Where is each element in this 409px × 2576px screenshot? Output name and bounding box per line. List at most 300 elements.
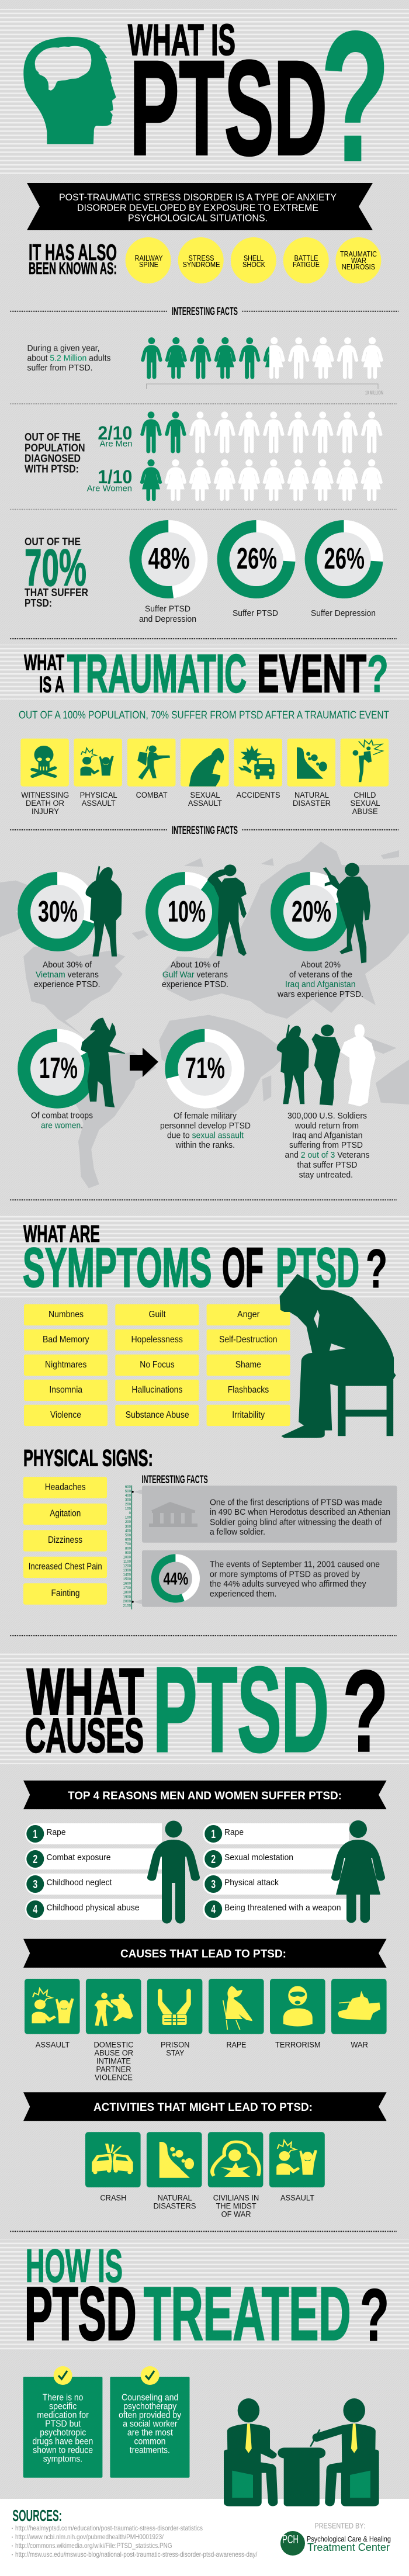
- timeline: 900: [125, 1552, 131, 1555]
- section heading: what are symptoms of PTSD: OF: [222, 1237, 264, 1299]
- icon: check badge: [141, 2366, 160, 2385]
- timeline: 100: [125, 1516, 131, 1520]
- presented by logo: PRESENTED BY:: [314, 2522, 365, 2530]
- cause labels: ASSAULT: [36, 2040, 70, 2049]
- caption: 300,000 soldiers: [285, 1112, 369, 1180]
- sources: http://healmyptsd.com/education/post-traumatic-stress-disorder-statistics: [15, 2524, 203, 2532]
- fact box: September 11: [142, 1550, 397, 1607]
- donut: 20%: [268, 870, 352, 954]
- section heading: how is PTSD treated: ?: [360, 2274, 389, 2356]
- cause labels: INTIMATE: [96, 2056, 131, 2065]
- figure: man on chair: [280, 1274, 396, 1438]
- hero striped band: [0, 9, 409, 174]
- illustration: therapy session: [224, 2398, 379, 2506]
- cause labels: VIOLENCE: [95, 2073, 133, 2082]
- treatment card: medication: shown to reduce: [33, 2445, 93, 2455]
- fact box: September 11: experienced them.: [210, 1589, 276, 1599]
- treatment card: counseling: often provided by: [119, 2410, 181, 2420]
- icon: child abuse: [353, 740, 383, 782]
- section heading: what causes PTSD: CAUSES: [25, 1708, 144, 1763]
- list: women reasons: 4: [211, 1902, 216, 1916]
- timeline: 1400: [123, 1574, 131, 1577]
- event labels: INJURY: [32, 807, 59, 816]
- caption: 300,000 soldiers: that suffer PTSD: [297, 1161, 358, 1170]
- sources: SOURCES:: [12, 2506, 62, 2525]
- section heading: what is a traumatic event: IS A: [39, 672, 64, 698]
- caption: Iraq and Afganistan: wars experience PTSD.: [277, 990, 363, 999]
- treatment card: medication: PTSD but: [45, 2419, 81, 2429]
- cause labels: ABUSE OR: [95, 2048, 133, 2057]
- section heading: what are symptoms of PTSD: [23, 1220, 387, 1299]
- cause labels: STAY: [166, 2048, 184, 2057]
- event labels: ACCIDENTS: [236, 791, 280, 799]
- icon: assault: [32, 1989, 74, 2023]
- event labels: [21, 791, 380, 816]
- caption: female military: [160, 1112, 251, 1150]
- text: out of the 70%: OUT OF THE: [25, 536, 81, 548]
- caption: 300,000 soldiers: and 2 out of 3 Veterans: [285, 1151, 369, 1160]
- text: out of the 70%: THAT SUFFER: [25, 587, 88, 598]
- physical sign cards: Fainting: [51, 1588, 79, 1598]
- second striped band: [0, 645, 409, 700]
- donut: 48%: [131, 522, 206, 596]
- section heading: how is PTSD treated: PTSD: [25, 2272, 137, 2356]
- world map background: [0, 842, 409, 1188]
- soldier: with rifle: [323, 863, 370, 963]
- event labels: ASSAULT: [82, 799, 116, 808]
- caption: female military: within the ranks.: [175, 1141, 235, 1150]
- physical sign cards: Agitation: [50, 1509, 81, 1519]
- caption: female military: Of female military: [174, 1112, 237, 1121]
- list: women reasons: Being threatened with a weapon: [224, 1903, 341, 1913]
- scale bracket: 10 million: [146, 384, 383, 396]
- section heading: what are symptoms of PTSD: SYMPTOMS: [23, 1237, 212, 1299]
- list: men reasons: Rape: [47, 1827, 65, 1837]
- donut: 44%: 44%: [164, 1570, 188, 1589]
- list: men reasons: Childhood physical abuse: [47, 1903, 139, 1913]
- icon: natural disaster: [297, 747, 327, 779]
- caption: Gulf War: About 10% of: [171, 961, 220, 970]
- list: women reasons: Sexual molestation: [224, 1853, 293, 1862]
- fact box: Herodotus: in 490 BC when Herodotus described an Athenian: [210, 1507, 390, 1517]
- third striped band: [0, 1216, 409, 1299]
- donut: 71%: [164, 1028, 245, 1109]
- text: out of the population diagnosed: DIAGNOSED: [25, 452, 81, 464]
- timeline: 1500: [123, 1578, 131, 1581]
- heading: it has also been known as: [29, 240, 117, 278]
- symptom cards: Anger: [237, 1310, 259, 1320]
- text: out of the population diagnosed: OUT OF THE: [25, 431, 81, 443]
- list: women reasons: 2: [211, 1852, 216, 1866]
- treatment card: medication: psychotropic: [40, 2428, 86, 2437]
- fact box: Herodotus: One of the first descriptions of PTSD was made: [210, 1497, 382, 1507]
- donut: 26% depression: [309, 524, 379, 594]
- heading: physical signs: PHYSICAL SIGNS:: [23, 1446, 153, 1471]
- section heading: what is PTSD: WHAT IS: [128, 15, 235, 64]
- banner: causes that lead to PTSD: CAUSES THAT LEAD TO PTSD:: [120, 1947, 286, 1960]
- timeline: 200: [125, 1521, 131, 1524]
- banner: definition: [27, 183, 373, 230]
- donut: 44%: [149, 1552, 202, 1605]
- text: out of the population diagnosed: WITH PTSD:: [25, 463, 79, 475]
- icon: tank: [338, 1991, 380, 2020]
- sources: http://msw.usc.edu/mswusc-blog/national-post-traumatic-stress-disorder-ptsd-awareness-day/: [15, 2550, 258, 2558]
- icon: large woman: [331, 1820, 385, 1923]
- treatment card: counseling: [110, 2366, 189, 2478]
- green activity cards: [85, 2132, 325, 2187]
- symptom cards: Bad Memory: [43, 1335, 89, 1345]
- activity labels: CIVILIANS IN: [213, 2194, 259, 2203]
- treatment card: counseling: Counseling and: [122, 2393, 178, 2402]
- timeline: 1800: [123, 1591, 131, 1595]
- text: 5.2 million adults: [27, 344, 111, 373]
- sources: [12, 2506, 258, 2558]
- banner: causes that lead to PTSD: [23, 1939, 387, 1968]
- donut captions: and Depression: [139, 615, 196, 624]
- yellow circles: other names: RAILWAY: [134, 254, 163, 262]
- donut captions: Suffer PTSD: [233, 609, 278, 618]
- sources: http://commons.wikimedia.org/wiki/File:PTSD_statistics.PNG: [15, 2542, 172, 2550]
- physical sign cards: Dizziness: [48, 1535, 82, 1545]
- yellow circles: other names: SHOCK: [242, 260, 265, 269]
- donut captions: [139, 605, 376, 624]
- section heading: what is a traumatic event: ?: [367, 645, 389, 704]
- timeline: 600: [125, 1486, 131, 1489]
- activity labels: ASSAULT: [280, 2194, 314, 2203]
- treatment card: counseling: a social worker: [123, 2419, 178, 2429]
- section heading: what is a traumatic event: WHAT: [24, 651, 64, 676]
- cause icons: [32, 1986, 380, 2030]
- event labels: WITNESSING: [21, 791, 69, 799]
- donut: 71%: 71%: [185, 1051, 225, 1085]
- timeline: 300: [125, 1525, 131, 1529]
- event labels: ABUSE: [352, 807, 378, 816]
- caption: Iraq and Afganistan: of veterans of the: [289, 971, 352, 980]
- symptom cards: Flashbacks: [228, 1385, 269, 1395]
- icon: large man: [147, 1821, 200, 1924]
- yellow event cards: [20, 739, 389, 787]
- list: men reasons: Combat exposure: [47, 1853, 111, 1862]
- section heading: what are symptoms of PTSD: ?: [366, 1238, 387, 1299]
- timeline: 500: [125, 1534, 131, 1538]
- fact box: Herodotus: Soldier going blind after witnessing the death of: [210, 1517, 382, 1527]
- yellow circles: other names: SYNDROME: [182, 260, 220, 269]
- text: 5.2 million adults: During a given year,: [27, 344, 99, 354]
- treatment card: medication: There is no: [43, 2393, 83, 2402]
- list: men reasons: [25, 1823, 162, 1920]
- banner: activities that might lead to PTSD: ACTIVITIES THAT MIGHT LEAD TO PTSD:: [93, 2101, 313, 2114]
- text: 5.2 million adults: about 5.2 Million adults: [27, 354, 111, 363]
- banner: definition: POST-TRAUMATIC STRESS DISORDER IS A TYPE OF ANXIETY: [59, 192, 337, 203]
- fact box: Herodotus: a fellow soldier.: [210, 1527, 265, 1537]
- yellow circles: other names: FATIGUE: [293, 260, 320, 269]
- soldier: female: [81, 1018, 125, 1107]
- event labels: COMBAT: [136, 791, 168, 799]
- donut: 48%: 48%: [148, 542, 190, 575]
- caption: Iraq and Afganistan: Iraq and Afganistan: [285, 980, 355, 989]
- cause labels: PRISON: [161, 2040, 189, 2049]
- donut: 30%: [15, 870, 99, 954]
- text: 5.2 million adults: suffer from PTSD.: [27, 363, 92, 373]
- activity labels: THE MIDST: [216, 2202, 257, 2211]
- treatment card: medication: medication for: [37, 2410, 89, 2420]
- symptom cards: Guilt: [148, 1310, 166, 1320]
- heading: it has also been known as: IT HAS ALSO: [29, 240, 117, 265]
- list: women reasons: Rape: [224, 1827, 244, 1837]
- banner: top 4 reasons: TOP 4 REASONS MEN AND WOMEN SUFFER PTSD:: [68, 1789, 342, 1802]
- section heading: what are symptoms of PTSD: WHAT ARE: [23, 1220, 100, 1247]
- physical sign cards: Increased Chest Pain: [29, 1562, 102, 1572]
- soldier: rifle at shoulder: [86, 866, 122, 957]
- cause labels: TERRORISM: [275, 2040, 321, 2049]
- treatment card: counseling: are the most: [127, 2428, 174, 2437]
- timeline: 100: [125, 1508, 131, 1511]
- banner: definition: PSYCHOLOGICAL SITUATIONS.: [128, 213, 268, 223]
- event labels: SEXUAL: [190, 791, 220, 799]
- caption: combat troops: are women.: [41, 1121, 83, 1130]
- list: women reasons: 1: [211, 1827, 216, 1841]
- icon: skull and bones: [33, 746, 55, 776]
- caption: combat troops: [31, 1111, 93, 1130]
- icon: terrorism: [283, 1986, 313, 2026]
- arrow: [130, 1048, 158, 1077]
- symptom cards: Nightmares: [45, 1360, 87, 1370]
- donut: 10%: [138, 865, 232, 958]
- yellow circles: other names: BATTLE: [294, 254, 318, 262]
- section heading: what is a traumatic event: TRAUMATIC: [67, 644, 247, 704]
- list: men reasons: 2: [33, 1852, 37, 1866]
- caption: 300,000 soldiers: stay untreated.: [299, 1171, 353, 1180]
- stat: 1/10 are women: [87, 466, 132, 494]
- presented by logo: [280, 2522, 391, 2556]
- timeline: 0: [129, 1512, 131, 1515]
- treatment card: medication: symptoms.: [43, 2454, 82, 2464]
- treatment card: counseling: psychotherapy: [123, 2401, 176, 2411]
- activity labels: DISASTERS: [153, 2202, 196, 2211]
- presented by logo: Psychological Care & Healing: [307, 2535, 391, 2543]
- yellow circles: other names: SHELL: [244, 254, 264, 262]
- soldier: saluting: [207, 864, 247, 957]
- icon: crash: [92, 2144, 133, 2174]
- donut: 26% PTSD: [221, 524, 292, 594]
- donut: 30%: 30%: [38, 895, 78, 928]
- timeline: 800: [125, 1547, 131, 1550]
- icon: physical assault: [80, 748, 114, 775]
- section heading: how is PTSD treated: HOW IS: [26, 2239, 123, 2292]
- timeline: [123, 1486, 142, 1609]
- banner: definition: DISORDER DEVELOPED BY EXPOSURE TO EXTREME: [77, 202, 318, 213]
- soldier group: three veterans: [277, 1024, 376, 1106]
- donut: 10%: 10%: [168, 895, 206, 928]
- text: out of the 70%: [25, 536, 88, 609]
- sources: http://www.ncbi.nlm.nih.gov/pubmedhealth/PMH0001923/: [15, 2533, 164, 2541]
- yellow circles: other names: [126, 237, 381, 283]
- icon: greek temple: [149, 1502, 197, 1527]
- list: women reasons: [203, 1823, 349, 1920]
- donut: 17%: [12, 1023, 103, 1114]
- list: men reasons: 3: [33, 1877, 37, 1891]
- cause labels: RAPE: [227, 2040, 247, 2049]
- yellow circles: other names: STRESS: [188, 254, 214, 262]
- caption: Vietnam: About 30% of: [43, 961, 92, 970]
- cause labels: [36, 2040, 368, 2082]
- timeline: 600: [125, 1538, 131, 1542]
- icon: assault: [276, 2140, 317, 2175]
- yellow circles: other names: SPINE: [139, 260, 158, 269]
- event labels: ASSAULT: [188, 799, 222, 808]
- text: out of the 70%: PTSD:: [25, 597, 52, 609]
- caption: Gulf War: Gulf War veterans: [162, 971, 228, 980]
- symptom cards: Substance Abuse: [126, 1410, 189, 1420]
- heading: it has also been known as: BEEN KNOWN AS:: [29, 259, 117, 278]
- caption: 300,000 soldiers: Iraq and Afganistan: [292, 1131, 362, 1141]
- caption: female military: personnel develop PTSD: [160, 1121, 251, 1131]
- icon: check badge: [54, 2366, 72, 2385]
- donut: 26% depression: 26%: [324, 542, 365, 575]
- pictogram: 5.2 of 10 million adults: [141, 337, 383, 379]
- symptom cards: Self-Destruction: [219, 1335, 278, 1345]
- icon: natural disaster: [160, 2142, 194, 2178]
- symptom cards: Irritability: [232, 1410, 265, 1420]
- heading: interesting facts small: INTERESTING FACTS: [141, 1474, 208, 1486]
- stat: 1/10 are women: Are Women: [87, 484, 132, 494]
- symptom cards: Hallucinations: [131, 1385, 183, 1395]
- symptom cards: Insomnia: [49, 1385, 82, 1395]
- caption: 300,000 soldiers: 300,000 U.S. Soldiers: [287, 1112, 367, 1121]
- treatment card: counseling: common: [134, 2436, 166, 2446]
- caption: Iraq and Afganistan: [277, 961, 363, 999]
- symptom cards: Numbnes: [48, 1310, 84, 1320]
- timeline: 1000: [123, 1556, 131, 1559]
- stat: 1/10 are women: 1/10: [98, 466, 132, 487]
- donut: 20%: 20%: [292, 895, 331, 928]
- treatment card: medication: [23, 2366, 102, 2478]
- icon: domestic abuse: [95, 1993, 133, 2026]
- timeline: 1100: [123, 1560, 131, 1564]
- timeline: 2100: [123, 1604, 131, 1608]
- symptom cards: [24, 1304, 290, 1426]
- timeline: 200: [125, 1503, 131, 1507]
- white footer: [0, 2499, 409, 2576]
- timeline: 1200: [123, 1565, 131, 1569]
- activity labels: [100, 2194, 314, 2219]
- timeline: 300: [125, 1499, 131, 1502]
- cause labels: WAR: [351, 2040, 368, 2049]
- timeline: 400: [125, 1494, 131, 1498]
- yellow circles: other names: WAR: [351, 256, 366, 265]
- symptom cards: Violence: [50, 1410, 81, 1420]
- treatment card: counseling: treatments.: [130, 2445, 170, 2455]
- icon: head with brain: [23, 37, 116, 144]
- timeline: 1700: [123, 1587, 131, 1590]
- list: men reasons: 4: [33, 1902, 38, 1916]
- timeline: 1900: [123, 1595, 131, 1599]
- cause labels: PARTNER: [96, 2065, 131, 2073]
- donut: 26% PTSD: 26%: [237, 542, 277, 575]
- treatment card: medication: drugs have been: [32, 2436, 93, 2446]
- timeline: 2000: [123, 1600, 131, 1604]
- banner: activities that might lead to PTSD: [23, 2092, 387, 2121]
- caption: Iraq and Afganistan: About 20%: [301, 961, 341, 970]
- interesting facts divider: INTERESTING FACTS: [172, 306, 238, 318]
- icon: accident: [238, 746, 275, 779]
- activity labels: CRASH: [100, 2194, 126, 2203]
- caption: Vietnam: Vietnam veterans: [36, 971, 99, 980]
- section heading: what causes PTSD: [25, 1642, 389, 1777]
- list: women reasons: Physical attack: [224, 1878, 279, 1888]
- timeline: 1300: [123, 1569, 131, 1573]
- fact box: Herodotus: [142, 1486, 397, 1543]
- icon: combat soldier: [137, 746, 170, 780]
- event labels: DISASTER: [293, 799, 331, 808]
- stat: 2/10 are men: Are Men: [99, 439, 132, 449]
- cause labels: DOMESTIC: [93, 2040, 134, 2049]
- caption: Vietnam: experience PTSD.: [34, 980, 100, 989]
- fact box: September 11: or more symptoms of PTSD as proved by: [210, 1569, 360, 1579]
- event labels: SEXUAL: [351, 799, 380, 808]
- yellow circles: other names: TRAUMATIC: [340, 250, 377, 258]
- activity labels: NATURAL: [158, 2194, 192, 2203]
- physical sign cards: [23, 1477, 107, 1605]
- event labels: DEATH OR: [26, 799, 64, 808]
- yellow circles: other names: NEUROSIS: [342, 262, 375, 271]
- section heading: what causes PTSD: WHAT: [27, 1655, 144, 1729]
- event labels: NATURAL: [294, 791, 329, 799]
- fourth striped band: [0, 1653, 409, 1764]
- caption: Gulf War: [162, 961, 228, 989]
- text: out of the 70%: 70%: [25, 538, 86, 597]
- caption: 300,000 soldiers: would return from: [294, 1121, 359, 1131]
- pictogram: women 1 of 10: [140, 459, 383, 501]
- list: men reasons: 1: [33, 1827, 38, 1841]
- green cause cards: [25, 1979, 387, 2034]
- caption: Vietnam: [34, 961, 100, 989]
- physical sign cards: Headaches: [45, 1482, 86, 1492]
- fact box: September 11: the 44% adults surveyed who affirmed they: [210, 1579, 366, 1589]
- list: women reasons: 3: [211, 1877, 216, 1891]
- timeline: 1600: [123, 1583, 131, 1586]
- event labels: PHYSICAL: [80, 791, 117, 799]
- section heading: how is PTSD treated: [25, 2239, 389, 2356]
- activity labels: OF WAR: [221, 2210, 251, 2219]
- caption: 300,000 soldiers: suffering from PTSD: [289, 1141, 363, 1150]
- scale bracket: 10 million: 10 MILLION: [365, 390, 383, 396]
- text: out of the population diagnosed: POPULATION: [25, 442, 85, 453]
- symptom cards: No Focus: [140, 1360, 175, 1370]
- soldier silhouettes: [81, 863, 376, 1107]
- pictogram: men 2 of 10: [140, 411, 382, 453]
- symptom cards: Shame: [235, 1360, 261, 1370]
- event labels: CHILD: [353, 791, 376, 799]
- caption: female military: due to sexual assault: [167, 1131, 244, 1141]
- banner: top 4 reasons: [23, 1781, 387, 1809]
- text: out of the population diagnosed: [25, 431, 85, 475]
- fact box: September 11: The events of September 11, 2001 caused one: [210, 1560, 380, 1570]
- event icons: [33, 740, 383, 787]
- treatment card: medication: specific: [49, 2401, 77, 2411]
- fifth striped band: [0, 2239, 409, 2350]
- presented by logo: PCH: [282, 2533, 299, 2546]
- list: men reasons: Childhood neglect: [47, 1878, 112, 1888]
- donut captions: Suffer Depression: [311, 609, 376, 618]
- icon: rape: [223, 1986, 252, 2030]
- caption: combat troops: Of combat troops: [31, 1111, 93, 1120]
- icon: prison hands: [158, 1989, 191, 2025]
- presented by logo: Treatment Center: [307, 2542, 390, 2553]
- icon: sexual assault figure: [189, 748, 224, 787]
- caption: Gulf War: experience PTSD.: [162, 980, 228, 989]
- activity icons: [92, 2140, 317, 2178]
